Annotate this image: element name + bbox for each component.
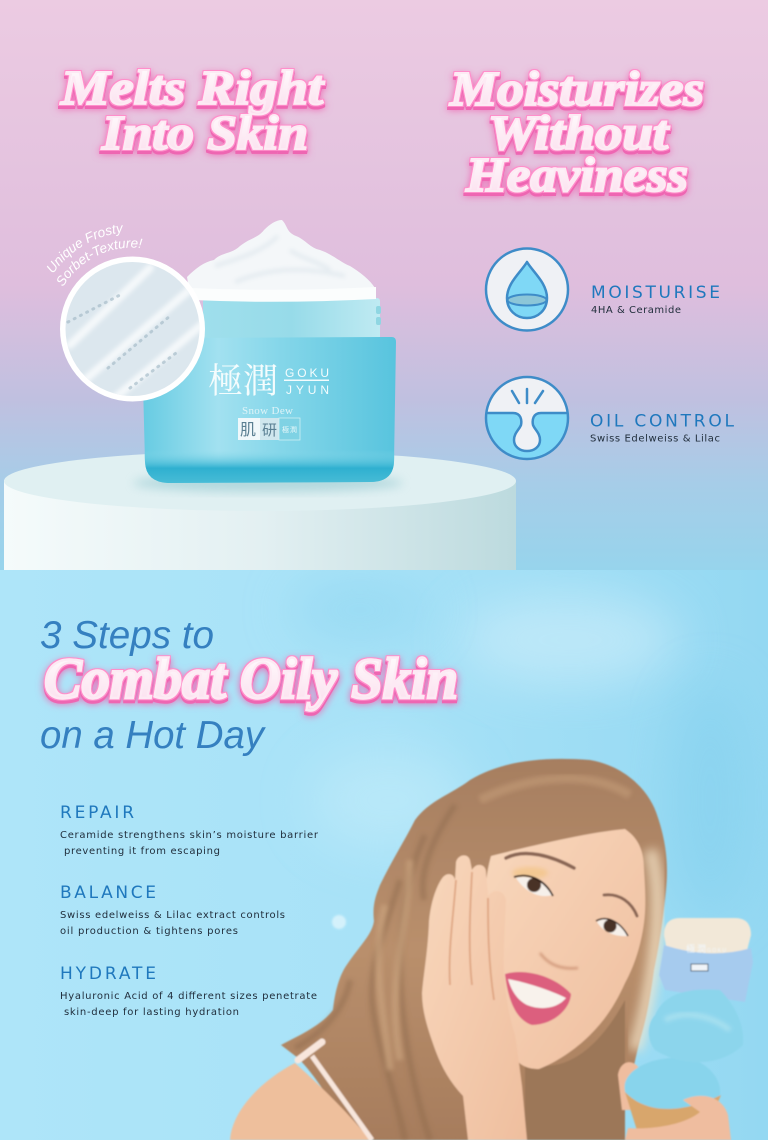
step: hydrate bbox=[60, 964, 317, 1018]
jar logo bbox=[208, 362, 329, 440]
panel: bottom sky background bbox=[310, 570, 768, 1140]
lower scoop bbox=[625, 1057, 720, 1114]
shoulder bbox=[230, 1063, 370, 1140]
text: moisturise: MOISTURISE bbox=[591, 283, 720, 303]
text: oil control: OIL CONTROL bbox=[590, 412, 735, 432]
jar logo: JYUN bbox=[286, 383, 329, 397]
step: repair: Ceramide strengthens skin’s moisture barrier bbox=[60, 830, 319, 841]
cone bbox=[624, 1092, 722, 1130]
product jar bbox=[142, 220, 396, 483]
jar logo: Snow Dew bbox=[242, 405, 293, 417]
eyes bbox=[516, 877, 552, 896]
upper scoop bbox=[649, 990, 743, 1062]
step: repair: REPAIR bbox=[60, 803, 134, 823]
heading: Melts Right Into Skin: Melts Right bbox=[60, 60, 325, 115]
text: moisturise bbox=[591, 283, 720, 316]
jar logo: 極潤 bbox=[282, 425, 297, 435]
icon: moisturise drop bbox=[486, 248, 568, 330]
jar logo: GOKU bbox=[285, 366, 329, 380]
photo: woman with ice cream bbox=[230, 759, 753, 1140]
thumb bbox=[617, 1062, 639, 1111]
cream swirl bbox=[187, 220, 375, 296]
texture swatch circle bbox=[60, 256, 205, 402]
heading: Melts Right Into Skin: Into Skin bbox=[101, 105, 308, 160]
podium bbox=[4, 451, 516, 570]
heading: Moisturizes Without Heaviness: Without bbox=[488, 105, 670, 160]
ice cream jar: 極潤 bbox=[686, 942, 706, 955]
heading: Melts Right Into Skin bbox=[60, 60, 325, 160]
eyeshadow bbox=[512, 867, 548, 879]
text: oil control: Swiss Edelweiss & Lilac bbox=[590, 434, 720, 444]
jar body bbox=[142, 337, 396, 483]
jar logo: 研 bbox=[262, 419, 277, 440]
nose bbox=[540, 953, 578, 968]
heading: 3 Steps to: 3 Steps to bbox=[40, 614, 214, 657]
brows bbox=[506, 853, 574, 868]
heading: Combat Oily Skin: Combat Oily Skin bbox=[44, 646, 458, 711]
step: hydrate: skin-deep for lasting hydration bbox=[64, 1007, 239, 1018]
text: oil control bbox=[590, 412, 735, 444]
panel: top background bbox=[0, 0, 768, 570]
step: hydrate: HYDRATE bbox=[60, 964, 156, 984]
mouth bbox=[505, 972, 571, 1025]
ice cream jar: GOKU bbox=[707, 948, 726, 954]
heading: on a Hot Day: on a Hot Day bbox=[40, 714, 266, 757]
heading: Moisturizes Without Heaviness bbox=[449, 61, 704, 202]
step: hydrate: Hyaluronic Acid of 4 different sizes penetrate bbox=[60, 991, 317, 1002]
step: balance: BALANCE bbox=[60, 883, 156, 903]
step: balance: oil production & tightens pores bbox=[60, 926, 238, 937]
hair bbox=[281, 759, 667, 1140]
inner rim bbox=[190, 287, 376, 302]
neck shadow bbox=[525, 1000, 625, 1140]
step: balance: Swiss edelweiss & Lilac extract controls bbox=[60, 910, 285, 921]
hair glow bbox=[635, 850, 658, 1050]
icon: oil control pore bbox=[484, 376, 570, 460]
label: Unique Frosty Sorbet-Texture: Unique Frosty bbox=[46, 224, 123, 272]
heading: Moisturizes Without Heaviness: Moisturizes bbox=[449, 61, 704, 116]
hand bbox=[422, 855, 527, 1140]
jar neck bbox=[203, 298, 380, 340]
heading: Moisturizes Without Heaviness: Heaviness bbox=[465, 147, 688, 202]
text: moisturise: 4HA & Ceramide bbox=[591, 305, 681, 316]
holding hand bbox=[625, 1096, 731, 1140]
ice cream jar bbox=[659, 918, 753, 1002]
step: repair: preventing it from escaping bbox=[64, 846, 220, 857]
strap bbox=[312, 1056, 372, 1140]
jar logo: 極潤 bbox=[208, 362, 278, 401]
jar logo: 肌 bbox=[240, 416, 256, 440]
label: Unique Frosty Sorbet-Texture: Sorbet-Texture! bbox=[57, 238, 142, 286]
step: balance bbox=[60, 883, 285, 937]
face bbox=[485, 829, 645, 1069]
step: repair bbox=[60, 803, 319, 857]
